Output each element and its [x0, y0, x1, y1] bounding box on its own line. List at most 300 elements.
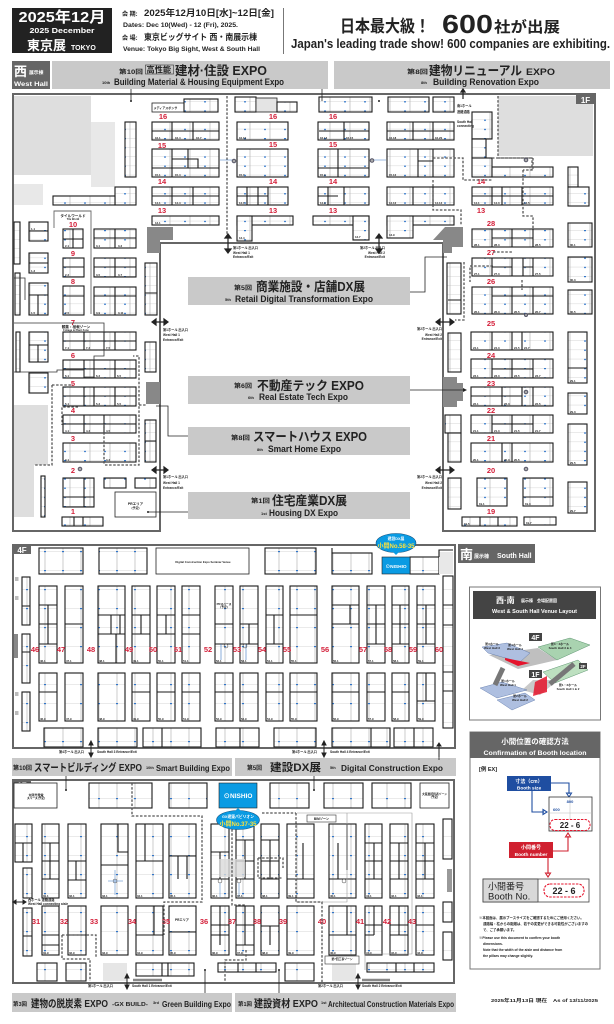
booths: south 4F top row: Digital Construction Expo Seminar Venue [175, 560, 231, 564]
isometric venue illustration: 第3・4ホール [551, 641, 569, 646]
booths: west hall right wing: 21-5 [514, 429, 520, 433]
entrance arrows and labels: west hall [152, 89, 474, 490]
hall label 4F: 4F [17, 546, 27, 555]
red block numbers: west hall [69, 112, 496, 516]
booths: south 1F lower aisles: 42-9 [391, 951, 397, 955]
red block numbers: west hall: 8 [71, 277, 75, 286]
notes: Note that the width of the aisle and distance from [483, 948, 562, 952]
booths: south 4F upper aisles: 52-1 [216, 659, 222, 663]
hall label 1F [576, 95, 595, 105]
red block numbers: south 1F: 43 [408, 917, 416, 926]
booths: south 1F side and bottom rows [37, 819, 452, 981]
banner: real estate tech expo: Real Estate Tech Expo [259, 392, 348, 402]
booths: south 1F upper aisles: 31-1 [43, 894, 49, 898]
banner: housing dx expo [188, 492, 410, 519]
walkway dashed routes: south 1F: BIMゾーン [314, 817, 329, 821]
booths: south 1F lower aisles: 38-9 [262, 951, 268, 955]
booths: west hall left wing: 6-1 [65, 374, 69, 378]
booths: west hall left wing: 2-3 [65, 273, 69, 277]
booths: west hall upper center: 16-18 [389, 136, 397, 140]
walkway dashed routes: west hall [14, 96, 533, 471]
booths: west hall right wing: 20-5 [514, 458, 520, 462]
booths: west hall right wing: 29-7 [570, 509, 576, 513]
booths: south 1F lower aisles: 31-9 [43, 951, 49, 955]
banner: green building expo [12, 993, 232, 1012]
booths: south 4F upper aisles: 59-1 [418, 659, 424, 663]
red block numbers: west hall: 3 [71, 434, 75, 443]
banner: building material expo: 第10回 [119, 68, 143, 76]
venue layout header: 展示棟 会場配置図 [521, 597, 557, 603]
red block numbers: south 1F: 37 [228, 917, 236, 926]
entrance labels: south 4F: South Hall 4 Entrance/Exit [330, 750, 371, 754]
booths: west hall right wing: 26-1 [474, 310, 480, 314]
banner: building material expo: 高性能 [146, 64, 171, 74]
booths: south 1F upper aisles: 35-1 [170, 894, 176, 898]
booths: south 1F upper aisles: 36-1 [212, 894, 218, 898]
callout: booth 58-35: 小間No.58-35 [377, 542, 415, 550]
entrance labels: south 1F: South Hall 1 Entrance/Exit [132, 984, 173, 988]
booths: west hall upper center: 16-1 [155, 136, 161, 140]
callout: booth 37-35: GX建築パビリオン [222, 814, 254, 819]
banner: architectural construction materials expo: 建設資材 EXPO [254, 997, 318, 1010]
booths: south 1F upper aisles: 34-1 [137, 894, 143, 898]
banner: digital construction expo: 建設DX展 [270, 760, 321, 774]
booth number table [483, 879, 589, 902]
red block numbers: south 1F: 31 [32, 917, 40, 926]
leader lines from expo banners [130, 89, 467, 513]
booths: west hall left wing: 3-11 [118, 311, 124, 315]
booths: west hall left wing: タイルワールド [60, 213, 86, 218]
red block numbers: south 1F: 36 [200, 917, 208, 926]
banner: digital construction expo: 5th [330, 766, 336, 770]
entrance labels: south 1F: West Hall connecting aisle [28, 902, 68, 906]
booths: south 4F lower aisles [39, 673, 435, 721]
booths: west hall right wing: 20-3 [504, 458, 510, 462]
panel: venue layout [470, 587, 600, 720]
isometric venue illustration: West Hall 4 [507, 647, 523, 651]
banner: housing dx expo: Housing DX Expo [269, 508, 338, 518]
booths: south 1F upper aisles: 38-1 [262, 894, 268, 898]
event dates and venue: 東京ビッグサイト 西・南展示棟 [144, 32, 257, 42]
entrance arrows and labels: west hall: South Hall [457, 120, 473, 124]
booths: south 4F upper aisles: 46-1 [40, 659, 46, 663]
hall outline [13, 94, 595, 531]
booth number table: 22 - 6 [552, 886, 576, 896]
banner: smart building expo: スマートビルディング EXPO [34, 761, 142, 774]
red block numbers: south 1F: 42 [383, 917, 391, 926]
banner: building renovation expo: Building Renovation Expo [433, 77, 540, 87]
booths: west hall right wing: 22-3 [504, 402, 510, 406]
booths: west hall upper center: 16-7 [196, 136, 202, 140]
booths: west hall left wing: 6-5 [117, 374, 121, 378]
entrance arrows and labels: west hall: 第1ホール 出入口 [233, 245, 258, 250]
red block numbers: west hall: 16 [159, 112, 167, 121]
south hall tag: 展示棟 [474, 553, 489, 560]
booths: west hall left wing: 4-1 [65, 429, 69, 433]
booths: west hall right wing: 30-3 [570, 278, 576, 282]
banner: smart building expo: 第10回 [13, 764, 32, 772]
booths: south 4F lower aisles: 53-9 [241, 717, 247, 721]
entrance labels: south 4F: South Hall 3 Entrance/Exit [97, 750, 138, 754]
red block numbers: south 1F: 33 [90, 917, 98, 926]
booths: south 4F lower aisles: 52-9 [216, 717, 222, 721]
red block numbers: west hall: 13 [158, 206, 166, 215]
event dates and venue: Venue: Tokyo Big Sight, West & South Hall [123, 46, 260, 53]
booths: west hall right wing: 24-5 [514, 346, 520, 350]
banner: digital construction expo: 第5回 [247, 764, 262, 772]
booths: west hall upper center: 14-14 [435, 201, 443, 205]
booths: south 1F upper aisles: 39-1 [288, 894, 294, 898]
banner: smart home expo: スマートハウス EXPO [253, 430, 367, 444]
date badge: 2025年12月 [18, 8, 106, 26]
banner: housing dx expo: 住宅産業DX展 [272, 493, 347, 508]
red block numbers: south 4F: 50 [149, 645, 157, 654]
booths: south 1F top row: (予定) [431, 795, 438, 799]
booths: west hall left wing: 観葉・植栽ゾーン [62, 324, 91, 329]
banner: green building expo: 第3回 [13, 1000, 27, 1008]
entrance arrows and labels: west hall: 第1ホール 出入口 [163, 327, 188, 332]
banner: retail digital transformation expo: Retail Digital Transformation Expo [235, 294, 373, 304]
booths: west hall upper center: 13-4 [239, 236, 245, 240]
booths: south 4F lower aisles: 57-9 [368, 717, 374, 721]
booth number label: Booth number [515, 852, 548, 858]
booths: west hall left wing: 3-5 [96, 273, 100, 277]
floor plan: south hall 4F [13, 534, 455, 757]
callout: booth 58-35 [376, 534, 416, 555]
banner: real estate tech expo: 6th [248, 395, 255, 400]
booths: west hall upper center: 14-1 [155, 201, 161, 205]
booths: south 1F upper aisles: 33-1 [102, 894, 108, 898]
notes [479, 915, 589, 958]
booths: west hall right wing: 26-7 [535, 310, 541, 314]
entrance arrows and labels: west hall: Entrance/Exit [422, 486, 443, 490]
red block numbers: west hall: 2 [71, 466, 75, 475]
booths: south 4F side and bottom rows [14, 576, 453, 747]
red block numbers: south 1F: 38 [253, 917, 261, 926]
booths: west hall left wing: 3-9 [96, 311, 100, 315]
red block numbers: west hall: 15 [329, 140, 337, 149]
red block numbers: south 1F: 41 [356, 917, 364, 926]
booths: west hall right wing: 27-1 [474, 272, 480, 276]
south hall tag: 南 [460, 547, 473, 562]
west hall tag: 展示棟 [29, 69, 44, 76]
banner: digital construction expo [235, 758, 456, 776]
red block numbers: west hall: 16 [329, 112, 337, 121]
booths: west hall left wing: 2-1 [65, 244, 69, 248]
isometric venue illustration: 4F [531, 635, 540, 642]
leader lines to bottom banners [65, 745, 439, 993]
red block numbers: south 4F: 54 [258, 645, 267, 654]
booths: west hall upper center: 16-10 [239, 136, 247, 140]
booths: west hall right wing: 26-5 [514, 310, 520, 314]
booths: west hall upper center: 15-7 [239, 173, 245, 177]
venue layout header: West & South Hall Venue Layout [492, 609, 577, 615]
guide header: Confirmation of Booth location [484, 751, 587, 757]
west hall tag: West Hall [14, 81, 48, 88]
booths: west hall right wing: 22-1 [473, 402, 479, 406]
entrance arrows and labels: west hall: West Hall 1 [233, 251, 250, 255]
red block numbers: west hall: 1 [71, 507, 75, 516]
banner: digital construction expo: Digital Construction Expo [341, 763, 443, 773]
booths: west hall upper center: 15-9 [320, 173, 326, 177]
entrance labels: south 4F [59, 741, 441, 757]
booths: south 1F lower aisles: 34-9 [137, 951, 143, 955]
example booth diagram: 600 [553, 807, 560, 812]
example tag: [例 EX] [479, 765, 497, 773]
south hall tag [458, 544, 535, 563]
booths: south 1F lower aisles: 35-9 [170, 951, 176, 955]
red block numbers: west hall: 22 [487, 406, 495, 415]
booths: west hall right wing: 30-1 [570, 243, 576, 247]
date badge: 東京展 [27, 38, 66, 53]
booths: south 4F top row [39, 548, 453, 574]
booths: south 4F lower aisles: 46-9 [40, 717, 46, 721]
booths: south 1F lower aisles: PRエリア [175, 917, 190, 922]
booths: west hall left wing: 2-5 [65, 311, 69, 315]
booths: south 4F upper aisles: 50-1 [158, 659, 164, 663]
banner: real estate tech expo [188, 376, 410, 404]
booths: south 4F upper aisles: PRスペース [217, 602, 232, 606]
entrance labels: south 1F: South Hall 2 Entrance/Exit [362, 984, 403, 988]
booths: south 1F upper aisles: 43-1 [417, 894, 423, 898]
red block numbers: west hall: 27 [487, 248, 495, 257]
booths: west hall upper center: 14-7 [239, 201, 245, 205]
banner: building material expo: 10th [102, 80, 111, 85]
booth size label: Booth size [517, 786, 541, 792]
booths: west hall left wing: 1-1 [31, 227, 35, 231]
isometric venue illustration: 第4ホール [508, 642, 522, 647]
red block numbers: south 4F: 59 [409, 645, 417, 654]
red block numbers: west hall: 6 [71, 351, 75, 360]
booths: south 1F upper aisles: 40-1 [330, 894, 336, 898]
booths: south 1F lower aisles: 41-9 [366, 951, 372, 955]
red block numbers: west hall: 24 [487, 351, 496, 360]
booth number table: 小間番号 [488, 880, 524, 892]
booths: west hall right wing: 23-3 [494, 374, 500, 378]
banner: retail digital transformation expo: 商業施設・店舗DX展 [256, 279, 365, 294]
booths: west hall left wing: 3-1 [96, 244, 100, 248]
red block numbers: south 4F: 52 [204, 645, 212, 654]
notes: the pillars may change slightly. [483, 954, 533, 958]
red block numbers: south 1F: 35 [162, 917, 170, 926]
isometric venue illustration: 第3ホール [485, 641, 499, 646]
banner: retail digital transformation expo [188, 277, 410, 305]
booths: south 4F upper aisles: 56-1 [333, 659, 339, 663]
booths: west hall right wing: 27-3 [494, 272, 500, 276]
main headline [291, 9, 610, 51]
booths: south 1F lower aisles: 43-9 [417, 951, 423, 955]
booths: west hall right wing: 24-3 [494, 346, 500, 350]
red block numbers: south 1F: 39 [279, 917, 287, 926]
red block numbers: west hall: 16 [269, 112, 277, 121]
banner: smart home expo [188, 427, 410, 455]
red block numbers: south 4F: 60 [435, 645, 443, 654]
booths: west hall right wing [445, 112, 592, 526]
red block numbers: west hall: 21 [487, 434, 495, 443]
booths: west hall left wing: PRエリア [128, 501, 144, 506]
isometric venue illustration: West Hall 3 [484, 646, 500, 650]
booths: west hall upper center: 16-4 [175, 136, 181, 140]
main headline: 600 [442, 9, 493, 39]
booths: south 4F upper aisles: 49-1 [133, 659, 139, 663]
isometric venue illustration: West Hall 2 [512, 698, 528, 702]
entrance arrows and labels: west hall: West Hall 1 [163, 481, 180, 485]
callout: booth 37-35: 小間No.37-35 [219, 820, 257, 828]
callout: booth 58-35: 建設DX展 [388, 536, 405, 541]
booths: west hall right wing: 29-5 [570, 461, 576, 465]
entrance arrows and labels: west hall: 連絡通路 [457, 109, 471, 114]
event dates and venue: 2025年12月10日[水]~12日[金] [144, 7, 274, 18]
banner: smart building expo: 10th [146, 766, 154, 770]
entrance arrows and labels: west hall: Entrance/Exit [365, 255, 386, 259]
booths: south 4F lower aisles: 59-9 [418, 717, 424, 721]
booths: west hall upper center: 16-15 [346, 136, 354, 140]
booths: south 1F top row [14, 783, 449, 808]
booths: south 4F lower aisles: 54-9 [267, 717, 273, 721]
west hall tag [12, 61, 50, 89]
red block numbers: south 4F: 56 [321, 645, 329, 654]
booths: west hall right wing: 23-1 [473, 374, 479, 378]
booths: south 4F upper aisles [39, 586, 435, 663]
red block numbers: west hall: 13 [269, 206, 277, 215]
booths: south 4F lower aisles: 56-9 [333, 717, 339, 721]
booths: south 4F lower aisles: 51-9 [183, 717, 189, 721]
booths: west hall left wing [14, 122, 157, 526]
red block numbers: south 1F: 34 [128, 917, 137, 926]
west hall tag: 西 [14, 64, 27, 79]
nishio sponsor block 1F [219, 783, 257, 808]
red block numbers: south 4F: 57 [359, 645, 367, 654]
notes: ※本図面は、展示ブースサイズをご確認するためにご使用ください。 [479, 915, 584, 920]
unused light gray zones [14, 96, 593, 517]
booths: west hall upper center: 16-20 [435, 136, 443, 140]
booths: west hall left wing: 1-5 [31, 311, 35, 315]
entrance labels: south 1F: 西ホール 連絡通路 [28, 897, 55, 902]
walkway dashed routes: south 1F [62, 783, 412, 983]
red block numbers: west hall: 5 [71, 379, 75, 388]
booths: south 1F upper aisles: 37-1 [237, 894, 243, 898]
red block numbers: west hall: 7 [71, 318, 75, 327]
guide header [470, 732, 600, 758]
notes: 通路幅・柱からの距離は、若干の変更ができる可能性がございますの [483, 921, 589, 926]
hall label 1F: 1F [17, 781, 27, 790]
entrance pillars [146, 227, 463, 407]
booths: south 4F upper aisles: 47-1 [66, 659, 72, 663]
event dates and venue: 会 期: [122, 10, 138, 18]
booths: west hall left wing: 4-3 [86, 429, 90, 433]
booths: west hall upper center: メディアスポンサ [154, 105, 177, 110]
entrance labels: south 4F: 第4ホール 出入口 [292, 749, 317, 754]
booths: west hall left wing: 3-3 [106, 458, 110, 462]
isometric venue illustration: South Hall 1 & 2 [557, 687, 580, 691]
banner: green building expo: 建物の脱炭素 EXPO [31, 997, 108, 1010]
nishio sponsor block 4F [382, 557, 410, 574]
isometric venue illustration [480, 633, 590, 710]
banner: real estate tech expo: 不動産テック EXPO [257, 378, 364, 393]
red block numbers: south 4F: 48 [87, 645, 95, 654]
booths: west hall right wing: 14-5 [524, 201, 530, 205]
red block numbers: south 1F: 32 [60, 917, 68, 926]
entrance arrows and labels: west hall: West Hall 2 [425, 481, 442, 485]
banner: green building expo: -GX BUILD- [112, 1002, 148, 1008]
banner: housing dx expo: 1st [261, 511, 267, 516]
booths: west hall left wing: 7-1 [65, 346, 69, 350]
date badge: TOKYO [71, 45, 96, 52]
guide header: 小間位置の確認方法 [501, 736, 569, 746]
booths: south 4F upper aisles: 55-1 [291, 659, 297, 663]
red block numbers: south 4F: 55 [283, 645, 291, 654]
booths: west hall upper center: 13-1 [155, 221, 161, 225]
isometric venue illustration: 2F [580, 664, 586, 669]
banner: building renovation expo: 8th [421, 80, 428, 85]
notes: ※Please use this document to confirm your booth [479, 936, 560, 940]
red block numbers: south 4F: 53 [233, 645, 241, 654]
floor plan: south hall 1F [13, 745, 454, 993]
booths: south 4F lower aisles: 50-9 [158, 717, 164, 721]
booths: west hall right wing: 20-1 [473, 458, 479, 462]
entrance arrows and labels: west hall: Entrance/Exit [163, 338, 184, 342]
red block numbers: south 4F: 47 [57, 645, 65, 654]
entrance arrows and labels: west hall: 第2ホール 出入口 [417, 326, 442, 331]
booths: west hall right wing: 24-7 [524, 346, 530, 350]
entrance arrows and labels: west hall: 南1ホール [457, 103, 472, 108]
banner: green building expo: 3rd [153, 1001, 160, 1005]
red block numbers: west hall: 13 [329, 206, 337, 215]
booths: west hall upper center: 15-4 [175, 173, 181, 177]
banner: architectural construction materials expo [235, 993, 456, 1012]
main headline: 日本最大級！ [340, 17, 430, 36]
nishio sponsor block 4F: ⊙NISHIO [385, 564, 407, 570]
booths: west hall right wing: 28-3 [494, 243, 500, 247]
booths: south 1F lower aisles: 40-9 [330, 951, 336, 955]
booths: west hall right wing: 14-3 [494, 201, 500, 205]
booths: west hall left wing: 3-1 [65, 458, 69, 462]
callout: booth 37-35 [216, 808, 260, 830]
entrance arrows and labels: west hall: 第2ホール 出入口 [417, 474, 442, 479]
booths: south 4F lower aisles: 55-9 [291, 717, 297, 721]
arrows: booth size [532, 783, 572, 814]
red block numbers: west hall: 4 [71, 406, 76, 415]
entrance labels: south 1F: 第1ホール 出入口 [88, 983, 113, 988]
entrance arrows and labels: west hall: 第2ホール 出入口 [360, 245, 385, 250]
red block numbers: west hall: 13 [477, 206, 485, 215]
booths: west hall right wing: 21-3 [494, 429, 500, 433]
booths: west hall right wing: 19-1 [479, 502, 485, 506]
red block numbers: south 4F: 51 [174, 645, 182, 654]
booths: south 4F upper aisles: 53-1 [241, 659, 247, 663]
isometric venue illustration: West Hall 1 [500, 683, 516, 687]
booths: west hall right wing: 19-7 [526, 521, 532, 525]
red block numbers: west hall: 23 [487, 379, 495, 388]
booths: south 1F lower aisles: 37-9 [237, 951, 243, 955]
red block numbers: west hall: 25 [487, 319, 495, 328]
entrance labels: south 1F [13, 897, 403, 989]
booths: west hall upper center: 15-1 [155, 173, 161, 177]
entrance arrows and labels: west hall: Entrance/Exit [233, 255, 254, 259]
red block numbers: west hall: 28 [487, 219, 495, 228]
booths: south 1F top row: スペース(予定) [27, 796, 45, 800]
booths: south 4F lower aisles: 58-9 [393, 717, 399, 721]
booths: west hall upper center: 14-9 [320, 201, 326, 205]
booths: west hall upper center: 15-12 [389, 173, 397, 177]
hall outline [13, 545, 455, 748]
panel: booth location guide [470, 732, 600, 969]
booth number label [509, 842, 553, 858]
hall label 4F [13, 545, 31, 555]
booths: south 4F lower aisles: 48-9 [99, 717, 105, 721]
booths: south 1F upper aisles: 41-1 [366, 894, 372, 898]
venue layout header [473, 591, 596, 619]
